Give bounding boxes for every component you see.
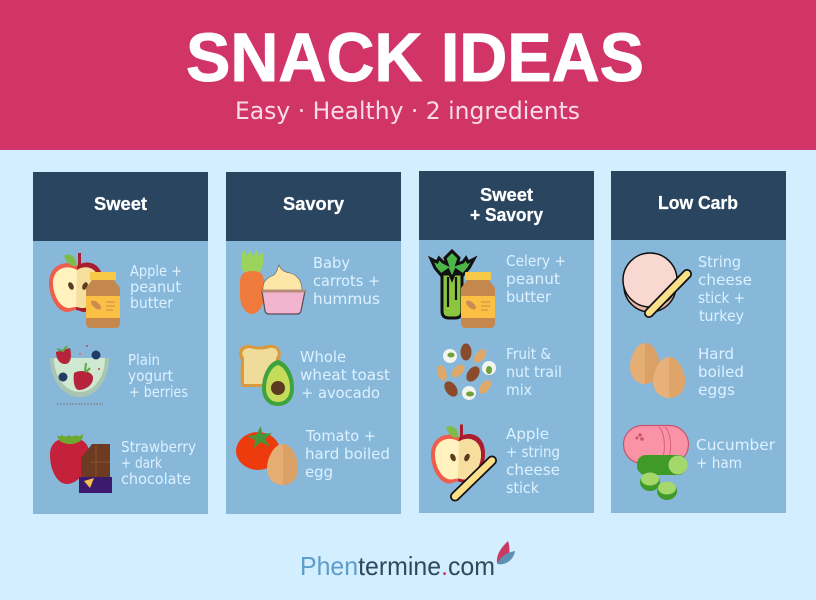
panel: sweet + savory: [419, 171, 594, 513]
icon: strawberry and dark chocolate: [50, 434, 112, 493]
text: tomato + hard boiled egg: hard boiled: [305, 445, 390, 463]
text: cucumber + ham: [696, 436, 776, 472]
text: baby carrots + hummus: carrots +: [313, 272, 380, 290]
title: SNACK IDEAS: [186, 19, 644, 96]
text: string cheese stick + turkey: [698, 253, 752, 325]
heading: sweet + savory: [419, 171, 594, 240]
text: celery + peanut butter: butter: [506, 288, 552, 306]
text: strawberry + dark chocolate: + dark: [121, 454, 162, 472]
panel: low carb: [611, 171, 786, 513]
logo: phentermine.com: [300, 541, 515, 581]
panel: savory: [226, 172, 401, 514]
panel: sweet: [33, 172, 208, 514]
text: celery + peanut butter: Celery +: [506, 252, 566, 270]
text: strawberry + dark chocolate: [121, 438, 196, 488]
text: apple + string cheese stick: + string: [506, 443, 560, 461]
heading: low carb: Low Carb: [658, 193, 738, 213]
text: cucumber + ham: Cucumber: [696, 436, 776, 454]
icon: tomato and hard boiled egg: [236, 426, 298, 485]
text: celery + peanut butter: peanut: [506, 270, 560, 288]
text: string cheese stick + turkey: turkey: [699, 307, 744, 325]
icon: baby carrots and hummus: [240, 250, 305, 314]
text: tomato + hard boiled egg: egg: [305, 463, 333, 481]
text: apple + peanut butter: peanut: [130, 278, 181, 296]
heading: sweet: Sweet: [94, 194, 147, 214]
text: whole wheat toast + avocado: + avocado: [301, 384, 380, 402]
text: string cheese stick + turkey: stick +: [698, 289, 745, 307]
heading: sweet: [33, 172, 208, 241]
icon: celery and peanut butter: [431, 251, 495, 328]
text: apple + string cheese stick: Apple: [506, 425, 549, 443]
text: hard boiled eggs: boiled: [698, 363, 744, 381]
text: plain yogurt + berries: + berries: [129, 383, 188, 401]
header banner: [0, 0, 816, 150]
subtitle: Easy · Healthy · 2 ingredients: [235, 97, 580, 125]
text: strawberry + dark chocolate: Strawberry: [121, 438, 196, 456]
text: baby carrots + hummus: [313, 254, 380, 308]
heading: savory: [226, 172, 401, 241]
text: strawberry + dark chocolate: chocolate: [121, 470, 191, 488]
text: apple + string cheese stick: [506, 425, 560, 497]
icon: hard boiled eggs: [630, 343, 685, 398]
text: fruit & nut trail mix: [506, 345, 562, 399]
text: whole wheat toast + avocado: [300, 348, 390, 402]
text: plain yogurt + berries: yogurt: [128, 367, 173, 385]
icon: whole wheat toast and avocado: [239, 345, 294, 406]
text: hard boiled eggs: [698, 345, 744, 399]
text: plain yogurt + berries: Plain: [128, 351, 160, 369]
text: fruit & nut trail mix: mix: [506, 381, 532, 399]
icon: string cheese and turkey: [623, 253, 687, 313]
text: celery + peanut butter: [506, 252, 566, 306]
text: apple + peanut butter: Apple +: [130, 262, 182, 280]
text: whole wheat toast + avocado: wheat toast: [300, 366, 390, 384]
text: whole wheat toast + avocado: Whole: [300, 348, 346, 366]
heading: low carb: [611, 171, 786, 240]
icon: apple and peanut butter: [49, 253, 120, 328]
text: tomato + hard boiled egg: Tomato +: [305, 427, 376, 445]
text: fruit & nut trail mix: nut trail: [506, 363, 562, 381]
logo: phentermine.com: Phentermine.com: [300, 551, 495, 581]
icon: cucumber and ham: [624, 426, 688, 500]
text: cucumber + ham: + ham: [696, 454, 742, 472]
icon: butterfly: [497, 541, 515, 564]
heading: savory: Savory: [283, 194, 344, 214]
text: fruit & nut trail mix: Fruit &: [506, 345, 551, 363]
icon: apple and string cheese: [431, 424, 492, 496]
text: string cheese stick + turkey: String: [698, 253, 741, 271]
text: baby carrots + hummus: Baby: [313, 254, 350, 272]
text: plain yogurt + berries: [128, 351, 188, 401]
heading: sweet + savory: + Savory: [470, 205, 543, 225]
text: string cheese stick + turkey: cheese: [698, 271, 752, 289]
text: apple + string cheese stick: cheese: [506, 461, 560, 479]
text: hard boiled eggs: eggs: [698, 381, 735, 399]
heading: sweet + savory: Sweet: [480, 185, 533, 205]
icon: fruit and nut trail mix: [436, 344, 496, 400]
text: hard boiled eggs: Hard: [698, 345, 734, 363]
icon: yogurt with berries: [50, 345, 109, 404]
text: apple + peanut butter: butter: [130, 294, 174, 312]
text: tomato + hard boiled egg: [305, 427, 390, 481]
text: apple + string cheese stick: stick: [506, 479, 539, 497]
text: baby carrots + hummus: hummus: [313, 290, 380, 308]
text: apple + peanut butter: [130, 262, 182, 312]
